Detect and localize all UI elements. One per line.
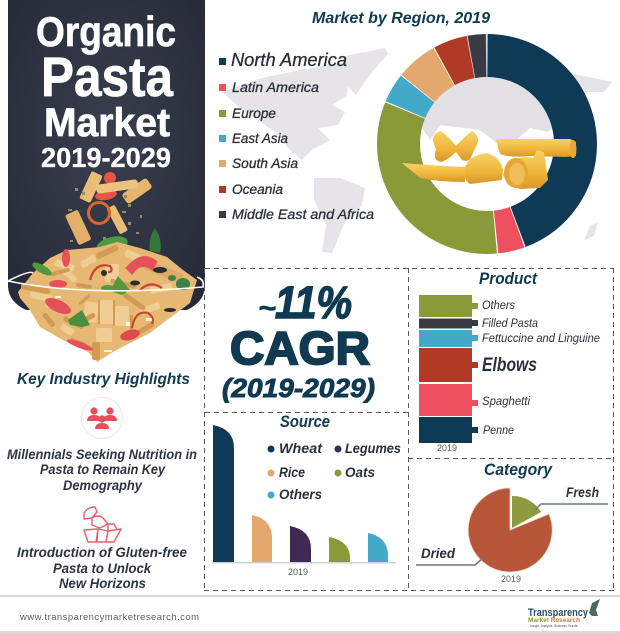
- source legend: Legumes: [345, 440, 401, 456]
- title: Organic: [36, 8, 176, 55]
- legend: regions: North America: [231, 50, 347, 70]
- icon: people: [82, 398, 122, 438]
- product labels: Spaghetti: [482, 396, 530, 408]
- illustration: pasta bowl: [8, 171, 203, 362]
- CAGR callout: (2019-2029): [222, 373, 375, 403]
- title: 2019-2029: [41, 142, 171, 173]
- source legend: [268, 440, 401, 502]
- logo: Insight. Analysis. Business Results: [530, 624, 578, 628]
- callout: dried: Dried: [421, 546, 456, 561]
- logo: Transparency: [528, 607, 589, 619]
- panel: source: Source: [280, 412, 330, 431]
- text: highlight two: Pasta to Unlock: [53, 561, 152, 576]
- heading: market by region: Market by Region, 2019: [312, 10, 490, 27]
- callout: fresh: Fresh: [566, 485, 599, 500]
- title: Market: [44, 101, 170, 145]
- product labels: Elbows: [482, 355, 537, 376]
- text: highlight two: Introduction of Gluten-free: [17, 545, 187, 560]
- legend: regions: East Asia: [232, 130, 288, 146]
- text: highlight one: Pasta to Remain Key: [40, 462, 166, 477]
- footer: [0, 595, 620, 633]
- pie chart: category: [468, 488, 552, 584]
- logo: Market Research: [528, 617, 580, 624]
- text: highlight two: New Horizons: [59, 576, 146, 591]
- text: highlight one: Demography: [63, 478, 143, 493]
- legend: regions: Oceania: [232, 181, 283, 197]
- dashed panel dividers: [204, 268, 614, 590]
- CAGR callout: 11%: [275, 277, 352, 328]
- bar chart: source: 2019: [288, 567, 308, 577]
- panel: product: [419, 269, 600, 453]
- product labels: Penne: [483, 425, 514, 437]
- source legend: Rice: [279, 464, 305, 480]
- CAGR callout: CAGR: [230, 322, 370, 374]
- callout: fresh: [535, 485, 608, 510]
- world map background: [222, 48, 612, 253]
- product labels: Fettuccine and Linguine: [482, 333, 600, 345]
- panel: title banner: [8, 0, 205, 310]
- icon: pasta outline: [84, 507, 121, 542]
- source legend: Wheat: [279, 440, 323, 456]
- title: [36, 8, 176, 173]
- source legend: Oats: [345, 464, 375, 480]
- title: Pasta: [41, 45, 174, 108]
- stacked bar: product: [419, 295, 478, 453]
- bar chart: source: [212, 425, 396, 577]
- legend: regions: Middle East and Africa: [232, 206, 374, 222]
- text: highlight one: Millennials Seeking Nutrition in: [7, 447, 197, 462]
- product labels: Filled Pasta: [482, 318, 538, 330]
- stacked bar: product: 2019: [437, 443, 457, 453]
- logo: [528, 599, 600, 628]
- pie chart: category: 2019: [501, 574, 521, 584]
- donut chart: market by region: [398, 56, 576, 232]
- illustration: pasta shapes: [402, 131, 576, 189]
- legend: regions: Latin America: [232, 79, 319, 95]
- panel: source: [212, 412, 401, 577]
- panel: category: [416, 460, 608, 584]
- product labels: Others: [482, 300, 515, 312]
- panel: category: Category: [484, 460, 553, 479]
- CAGR callout: [222, 277, 375, 403]
- CAGR callout: ~: [258, 292, 276, 325]
- website url: www.transparencymarketresearch.com: [19, 612, 199, 623]
- legend: regions: Europe: [232, 105, 276, 121]
- legend: regions: South Asia: [232, 155, 298, 171]
- panel: product: Product: [479, 269, 538, 288]
- callout: dried: [416, 546, 483, 565]
- legend: regions: [219, 50, 374, 222]
- source legend: Others: [279, 486, 322, 502]
- text: highlight two: [17, 545, 187, 591]
- text: highlight one: [7, 447, 197, 493]
- product labels: [482, 300, 600, 437]
- heading: key industry highlights: Key Industry Highlights: [17, 371, 190, 388]
